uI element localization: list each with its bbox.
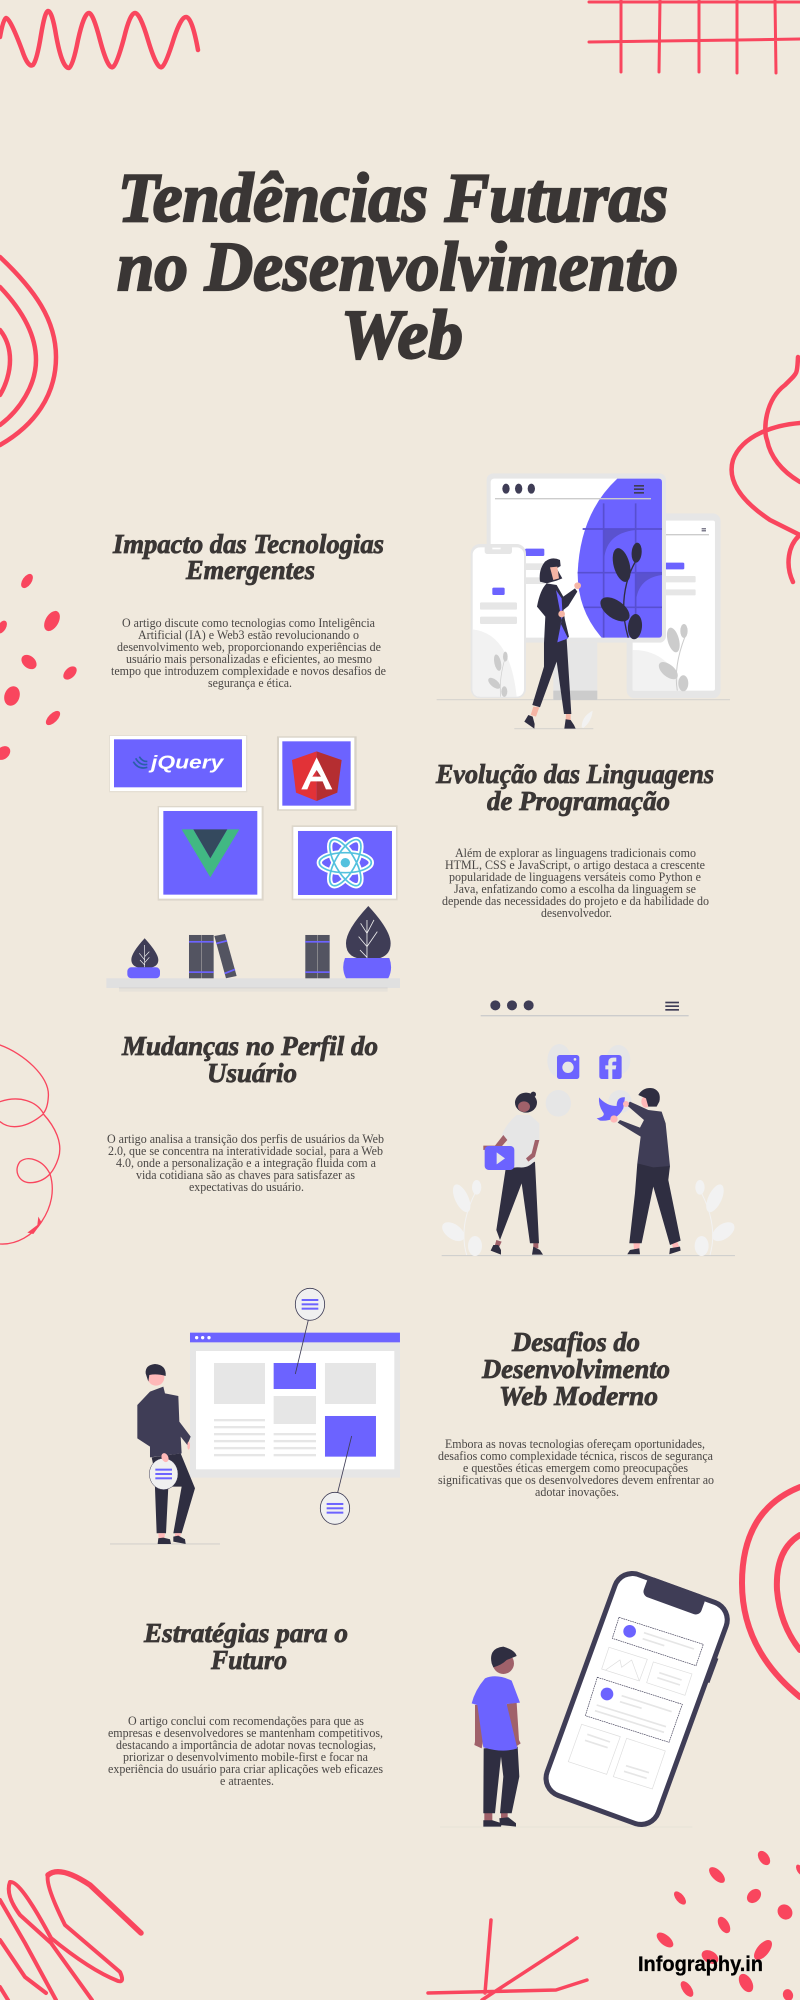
text block: vida cotidiana são as chaves para satisfazer as xyxy=(136,1168,355,1182)
text block: empresas e desenvolvedores se mantenham competitivos, xyxy=(108,1726,383,1740)
text block: significativas que os desenvolvedores devem enfrentar ao xyxy=(438,1473,714,1487)
text block: adotar inovações. xyxy=(535,1485,619,1499)
panel: evolucao das linguagens xyxy=(435,759,714,920)
plants xyxy=(439,1180,738,1256)
text block: e questões éticas emergem como preocupações xyxy=(463,1461,688,1475)
text block: destacando a importância de adotar novas tecnologias, xyxy=(116,1738,376,1752)
heading: Impacto das Tecnologias xyxy=(112,529,384,559)
text block: desenvolvimento web, proporcionando experiências de xyxy=(117,640,381,654)
text block: O artigo analisa a transição dos perfis de usuários da Web xyxy=(107,1132,384,1146)
heading: Desafios do xyxy=(511,1327,640,1357)
man reaching xyxy=(610,1088,681,1254)
panel: desafios xyxy=(438,1327,714,1499)
Vue frame xyxy=(158,806,264,901)
app cards xyxy=(568,1617,703,1789)
man xyxy=(472,1647,521,1827)
decoration: right scribble xyxy=(732,357,800,582)
illustration: man and giant phone xyxy=(440,1565,736,1833)
callout: bottom badge xyxy=(320,1436,352,1524)
title: Tendências Futuras xyxy=(118,160,668,237)
heading: Usuário xyxy=(207,1058,297,1088)
text block: Além de explorar as linguagens tradicionais como xyxy=(455,846,696,860)
text block: O artigo discute como tecnologias como Inteligência xyxy=(122,616,375,630)
heading xyxy=(143,1618,348,1675)
jQuery frame: jQuery xyxy=(149,751,225,772)
React frame xyxy=(292,825,398,900)
heading: de Programação xyxy=(487,786,670,816)
illustration: people with social media icons xyxy=(439,1000,738,1256)
speech blobs xyxy=(546,1044,632,1117)
jQuery frame xyxy=(109,735,247,792)
shelf xyxy=(106,978,400,992)
text block: usuário mais personalizadas e eficientes, ao mesmo xyxy=(126,652,372,666)
text block: Embora as novas tecnologias ofereçam oportunidades, xyxy=(445,1437,705,1451)
decoration: left red dots xyxy=(0,572,79,763)
decoration: top-right grid xyxy=(589,0,800,73)
heading: Estratégias para o xyxy=(143,1618,348,1648)
browser bar xyxy=(481,1000,689,1016)
large plant xyxy=(343,906,391,978)
panel: mudancas no perfil xyxy=(107,1031,384,1194)
heading: Futuro xyxy=(210,1645,287,1675)
heading: Evolução das Linguagens xyxy=(435,759,714,789)
decoration: right arcs xyxy=(742,1487,800,1697)
decoration: top-left zigzag xyxy=(0,11,198,68)
heading xyxy=(112,529,384,585)
text block: experiência do usuário para criar aplicações web eficazes xyxy=(108,1762,383,1776)
text block: priorizar o desenvolvimento mobile-first e focar na xyxy=(123,1750,368,1764)
text block xyxy=(108,1714,383,1788)
woman with video icon xyxy=(483,1092,543,1255)
phone xyxy=(471,544,526,698)
text block xyxy=(442,846,709,920)
text block: desafios como complexidade técnica, riscos de segurança xyxy=(438,1449,713,1463)
watermark: Infography.in xyxy=(638,1953,763,1976)
decoration: bottom-right dots xyxy=(654,1849,800,2000)
text block: depende das necessidades do projeto e da habilidade do xyxy=(442,894,709,908)
text block xyxy=(438,1437,714,1499)
woman xyxy=(524,558,593,729)
heading xyxy=(435,759,714,816)
monitor stand xyxy=(553,643,597,700)
browser window xyxy=(190,1333,400,1478)
icon: twitter bird xyxy=(597,1097,625,1121)
text block: O artigo conclui com recomendações para que as xyxy=(128,1714,364,1728)
text block xyxy=(107,1132,384,1194)
text block: e atraentes. xyxy=(220,1774,274,1788)
icon: facebook xyxy=(599,1055,622,1079)
decoration: left concentric arcs xyxy=(0,257,56,445)
text block: Java, enfatizando como a escolha da linguagem se xyxy=(454,882,696,896)
text block: 2.0, que se concentra na interatividade social, para a Web xyxy=(108,1144,383,1158)
illustration: woman and responsive screens xyxy=(437,473,730,729)
text block xyxy=(111,616,386,690)
title: no Desenvolvimento xyxy=(117,229,678,306)
heading: Desenvolvimento xyxy=(481,1354,670,1384)
illustration: man with web layout xyxy=(110,1288,400,1544)
Angular frame xyxy=(277,736,357,811)
text block: HTML, CSS e JavaScript, o artigo destaca a crescente xyxy=(445,858,705,872)
text block: popularidade de linguagens versáteis como Python e xyxy=(449,870,701,884)
books right xyxy=(305,935,330,978)
man xyxy=(137,1364,195,1544)
text block: desenvolvedor. xyxy=(541,906,612,920)
heading: Web Moderno xyxy=(499,1381,658,1411)
heading: Emergentes xyxy=(185,555,315,585)
phone body xyxy=(538,1565,736,1833)
decoration: bottom star strokes xyxy=(428,1920,587,2000)
heading xyxy=(121,1031,378,1088)
decoration: left swirl xyxy=(0,1045,60,1244)
panel: impacto das tecnologias xyxy=(111,529,386,690)
books left xyxy=(189,934,237,978)
illustration: framework logos on shelf xyxy=(106,735,400,992)
title: Web xyxy=(341,297,463,374)
icon: instagram xyxy=(557,1055,579,1079)
panel: estrategias xyxy=(108,1618,383,1788)
small plant xyxy=(127,938,160,978)
text block: expectativas do usuário. xyxy=(189,1180,304,1194)
heading: Mudanças no Perfil do xyxy=(121,1031,378,1061)
text block: segurança e ética. xyxy=(208,676,292,690)
title xyxy=(117,160,678,374)
tablet xyxy=(627,513,721,698)
callout: top badge xyxy=(295,1288,325,1374)
monitor xyxy=(487,473,666,643)
heading xyxy=(481,1327,670,1411)
text block: tempo que introduzem complexidade e novos desafios de xyxy=(111,664,386,678)
decoration: bottom-left scribble xyxy=(0,1872,141,2000)
text block: 4.0, onde a personalização e a integração fluida com a xyxy=(116,1156,376,1170)
text block: Artificial (IA) e Web3 estão revolucionando o xyxy=(138,628,359,642)
